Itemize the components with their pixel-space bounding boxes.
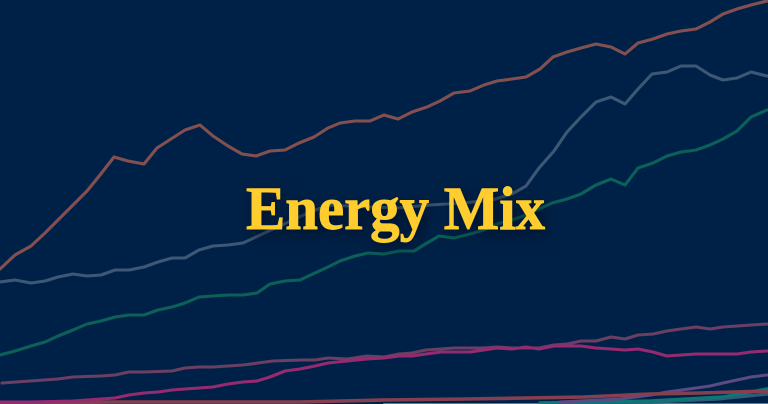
line: green series <box>0 110 767 355</box>
line: low purple series <box>560 375 767 402</box>
line: magenta series <box>0 346 767 402</box>
line: bottom edge light blue <box>384 403 768 404</box>
line: blue-grey series <box>0 66 767 283</box>
line: red series <box>0 1 767 269</box>
line: low red series <box>0 391 767 403</box>
title: Energy Mix <box>246 176 545 243</box>
line: low teal series <box>540 389 767 403</box>
line: mauve series <box>2 324 767 383</box>
line: low blue-grey series <box>560 394 767 403</box>
